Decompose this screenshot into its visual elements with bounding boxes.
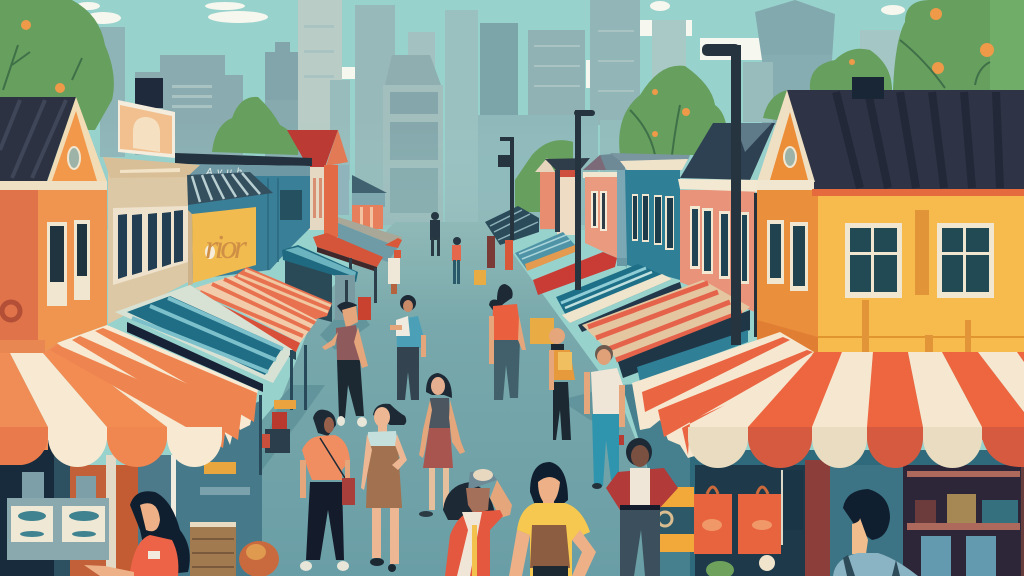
blue building sign: Avuh <box>205 167 242 178</box>
far dark awning <box>485 206 539 268</box>
sign text: rior <box>205 229 248 266</box>
far blue shop <box>352 175 387 229</box>
right street lamps <box>498 44 741 345</box>
shopper at far left <box>388 250 401 294</box>
teal awning shop <box>282 245 371 322</box>
left big awning <box>0 325 258 467</box>
small houses <box>535 158 590 235</box>
billboard <box>118 78 175 158</box>
grey striped awning <box>187 172 273 205</box>
red house <box>287 130 349 237</box>
teal striped awning right <box>556 264 682 332</box>
market stall goods <box>658 487 775 576</box>
person: white tee <box>584 345 625 489</box>
front orange awning <box>193 276 317 360</box>
woman vendor <box>84 491 190 576</box>
red awning <box>533 252 627 295</box>
blue building <box>175 153 312 280</box>
big right awning <box>632 332 1024 468</box>
stall base right <box>622 380 690 576</box>
road shadow patches <box>262 300 620 470</box>
woman in pinafore <box>361 404 407 572</box>
far figures <box>430 212 554 344</box>
yellow sign <box>188 207 256 286</box>
stall items under awnings <box>259 345 307 475</box>
red shop awning <box>313 233 383 303</box>
salmon building <box>583 153 627 268</box>
small teal awning <box>515 232 575 271</box>
trees <box>0 0 1024 212</box>
man orange tee <box>300 410 355 571</box>
woman apron <box>509 462 596 576</box>
clouds <box>76 1 905 88</box>
right side <box>485 44 1024 576</box>
shopping bags <box>694 487 781 554</box>
woman red shirt <box>443 469 512 576</box>
person: orange tee <box>489 284 526 400</box>
grey roof shop <box>338 217 402 262</box>
skyline <box>0 0 1024 230</box>
person: tank top <box>322 302 368 427</box>
man in red jacket <box>606 438 678 576</box>
left side <box>0 78 402 576</box>
left shop interior <box>0 400 279 576</box>
man from behind <box>833 489 918 576</box>
orange house <box>0 97 107 354</box>
large right house <box>757 77 1024 355</box>
pedestrians <box>300 212 678 576</box>
orange awning right <box>582 280 750 382</box>
road <box>230 222 690 576</box>
person: yellow vest <box>549 328 575 440</box>
beige shop <box>103 157 200 324</box>
blue building right <box>610 153 690 280</box>
salmon gabled building <box>678 123 775 337</box>
teal striped awning <box>115 285 293 392</box>
back orange awning <box>232 267 332 320</box>
right shop interior <box>690 450 1024 576</box>
person: blue tee <box>390 295 426 400</box>
woman in dress <box>419 373 465 517</box>
